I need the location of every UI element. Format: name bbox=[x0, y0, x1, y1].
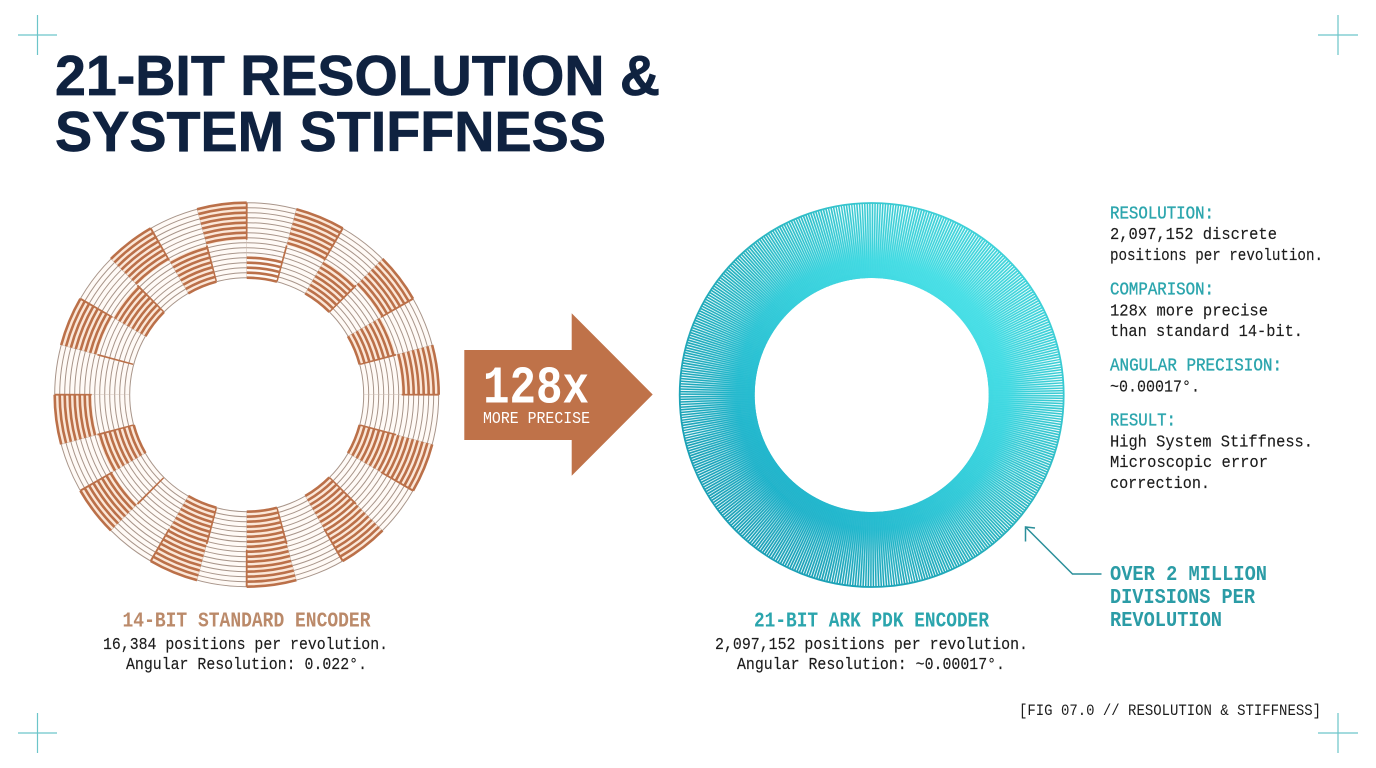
corner registration mark: top left bbox=[18, 15, 57, 55]
callout: over 2 million divisions: REVOLUTION bbox=[1110, 609, 1222, 633]
spec: comparison: than standard 14-bit. bbox=[1110, 323, 1303, 342]
arrow: callout leader bbox=[1026, 527, 1102, 574]
spec: resolution: positions per revolution. bbox=[1110, 247, 1323, 266]
spec: comparison: COMPARISON: bbox=[1110, 280, 1214, 300]
chart: 14-bit standard encoder ring bbox=[55, 203, 439, 587]
caption: 14-bit standard encoder bbox=[103, 610, 388, 675]
text panel: specifications bbox=[1110, 204, 1323, 494]
spec: comparison: 128x more precise bbox=[1110, 302, 1268, 322]
corner registration mark: bottom left bbox=[18, 713, 57, 753]
title: SYSTEM STIFFNESS bbox=[55, 100, 606, 164]
figure label: [FIG 07.0 // RESOLUTION & STIFFNESS] bbox=[1019, 702, 1321, 720]
spec: resolution: RESOLUTION: bbox=[1110, 204, 1214, 224]
spec: angular precision bbox=[1110, 356, 1282, 398]
title: 21-BIT RESOLUTION & bbox=[55, 44, 660, 108]
spec: result bbox=[1110, 412, 1313, 494]
spec: resolution bbox=[1110, 204, 1323, 266]
corner registration mark: top right bbox=[1318, 15, 1358, 55]
corner registration mark: bottom right bbox=[1318, 713, 1358, 753]
caption: 21-bit ARK PDK encoder: Angular Resolution: ~0.00017°. bbox=[737, 656, 1005, 675]
arrow: 128x more precise: MORE PRECISE bbox=[483, 410, 590, 429]
callout: over 2 million divisions bbox=[1110, 563, 1267, 633]
spec: result: Microscopic error bbox=[1110, 454, 1268, 473]
spec: resolution: 2,097,152 discrete bbox=[1110, 226, 1277, 245]
arrow: 128x more precise bbox=[464, 313, 653, 476]
spec: result: correction. bbox=[1110, 475, 1210, 494]
callout: over 2 million divisions: OVER 2 MILLION bbox=[1110, 563, 1267, 587]
caption: 14-bit standard encoder: 14-BIT STANDARD ENCODER bbox=[122, 610, 371, 634]
spec: comparison bbox=[1110, 280, 1303, 342]
caption: 14-bit standard encoder: Angular Resolution: 0.022°. bbox=[126, 656, 367, 675]
caption: 21-bit ARK PDK encoder bbox=[715, 610, 1028, 675]
callout: over 2 million divisions: DIVISIONS PER bbox=[1110, 586, 1255, 610]
arrow: 128x more precise: 128x bbox=[483, 359, 589, 419]
spec: result: High System Stiffness. bbox=[1110, 434, 1313, 452]
caption: 14-bit standard encoder: 16,384 positions per revolution. bbox=[103, 636, 388, 655]
caption: 21-bit ARK PDK encoder: 2,097,152 positions per revolution. bbox=[715, 636, 1028, 655]
title bbox=[55, 44, 660, 164]
spec: angular precision: ANGULAR PRECISION: bbox=[1110, 356, 1282, 376]
chart: 21-bit ARK PDK encoder ring bbox=[679, 202, 1065, 588]
caption: 21-bit ARK PDK encoder: 21-BIT ARK PDK ENCODER bbox=[754, 610, 989, 634]
spec: result: RESULT: bbox=[1110, 412, 1176, 432]
spec: angular precision: ~0.00017°. bbox=[1110, 378, 1200, 398]
